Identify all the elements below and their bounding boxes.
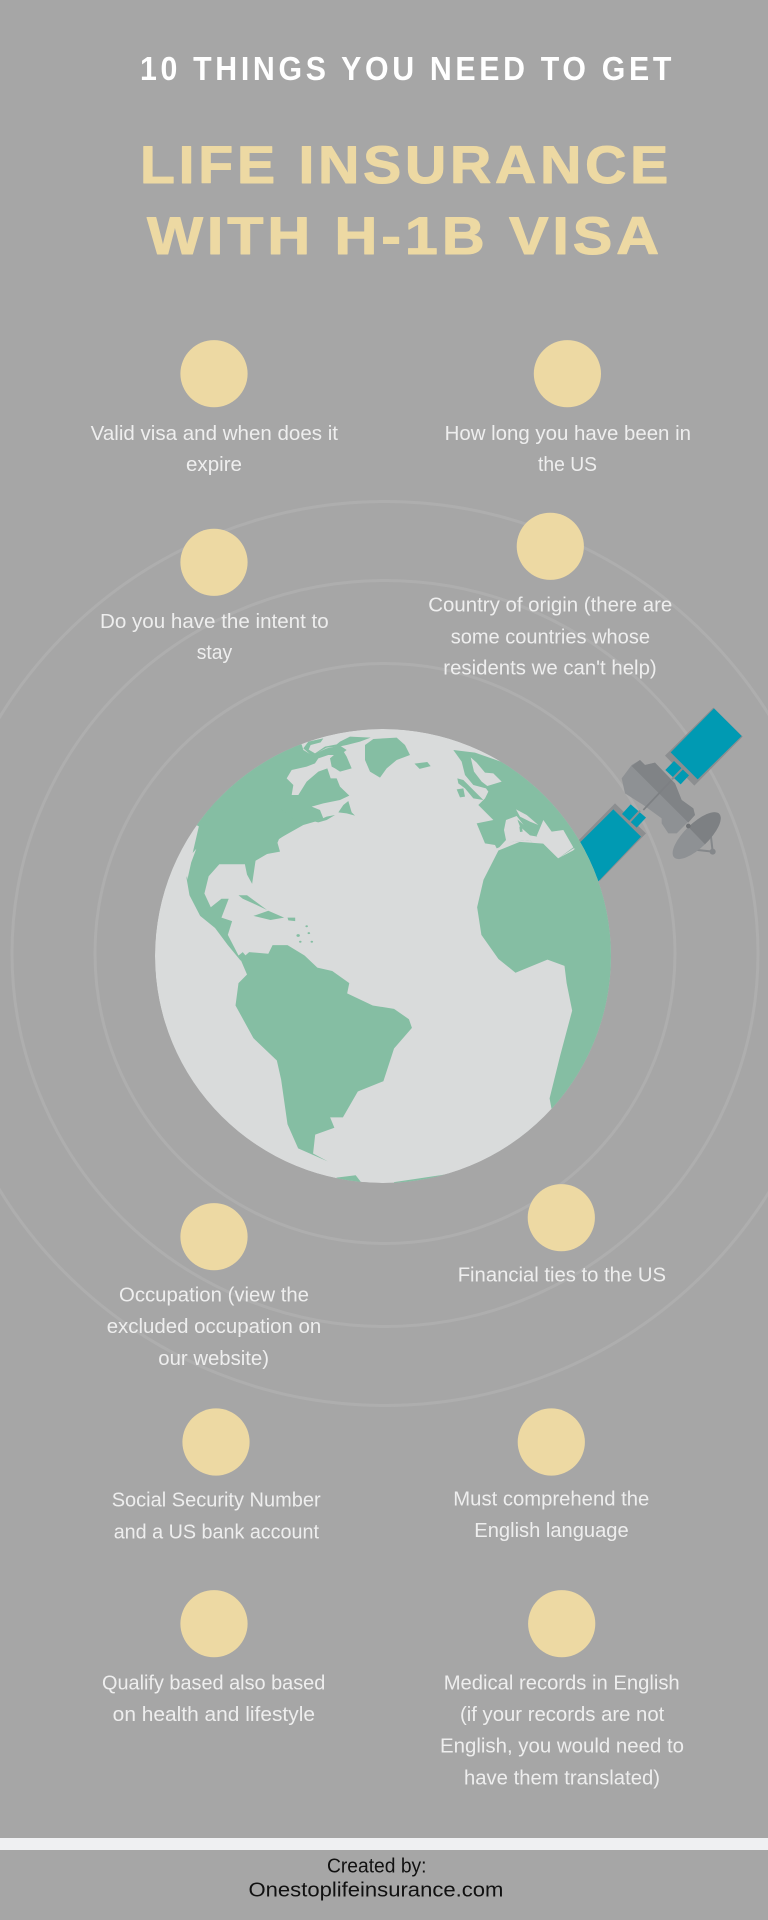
item: occupation [107,1203,321,1370]
item: medical records: Medical records in English [444,1671,680,1694]
item: medical records: have them translated) [464,1766,660,1789]
item: occupation: our website) [158,1347,269,1370]
item: occupation: Occupation (view the [119,1284,309,1307]
item: country of origin: residents we can't help) [443,657,657,680]
footer credit [248,1855,503,1902]
globe: Europe [454,750,585,858]
globe: Antarctica [336,1174,444,1183]
item: health and lifestyle: on health and lifestyle [113,1703,315,1726]
item: country of origin [428,513,672,680]
item: country of origin: Country of origin (there are [428,594,672,617]
footer credit: Onestoplifeinsurance.com [248,1879,503,1902]
item: how long in the US: the US [538,453,597,476]
footer divider bar [0,1838,768,1850]
item: English language [453,1408,649,1542]
title: life insurance with H-1B visa: WITH H-1B VISA [147,207,663,266]
globe: Baja strip [187,849,196,880]
item: valid visa: Valid visa and when does it [91,422,338,445]
icon: satellite [567,708,743,887]
item: English language: English language [474,1519,629,1542]
item: social security number [112,1408,321,1543]
item: valid visa: expire [186,453,242,476]
orbit rings [0,502,768,1406]
globe: Iceland [414,762,431,769]
globe: South America [236,945,412,1161]
footer credit: Created by: [327,1855,426,1878]
globe: Africa [477,842,611,1109]
item: intent to stay [100,529,329,664]
item: financial ties: Financial ties to the US [458,1264,666,1287]
item: occupation: excluded occupation on [107,1315,321,1338]
item: intent to stay: stay [197,641,233,664]
globe: Caribbean islands [238,895,313,943]
item: how long in the US: How long you have been in [445,422,691,445]
item: medical records: English, you would need to [440,1735,684,1758]
item: how long in the US [445,340,691,476]
globe: North and Central America [186,800,284,960]
item: valid visa [91,340,338,476]
item: social security number: Social Security Number [112,1489,321,1512]
subtitle: 10 things you need to get: 10 THINGS YOU NEED TO GET [140,50,675,87]
item: English language: Must comprehend the [453,1488,649,1511]
title: life insurance with H-1B visa [140,136,672,266]
item: country of origin: some countries whose [451,625,650,648]
title: life insurance with H-1B visa: LIFE INSURANCE [140,136,672,195]
item: medical records [440,1590,684,1789]
item: medical records: (if your records are not [460,1703,665,1726]
item: health and lifestyle: Qualify based also based [102,1671,325,1694]
item: financial ties [458,1184,666,1287]
item: intent to stay: Do you have the intent to [100,610,329,633]
item: social security number: and a US bank account [114,1520,319,1543]
globe: Canada and Greenland [207,737,410,865]
globe [151,729,654,1186]
item: health and lifestyle [102,1590,325,1726]
